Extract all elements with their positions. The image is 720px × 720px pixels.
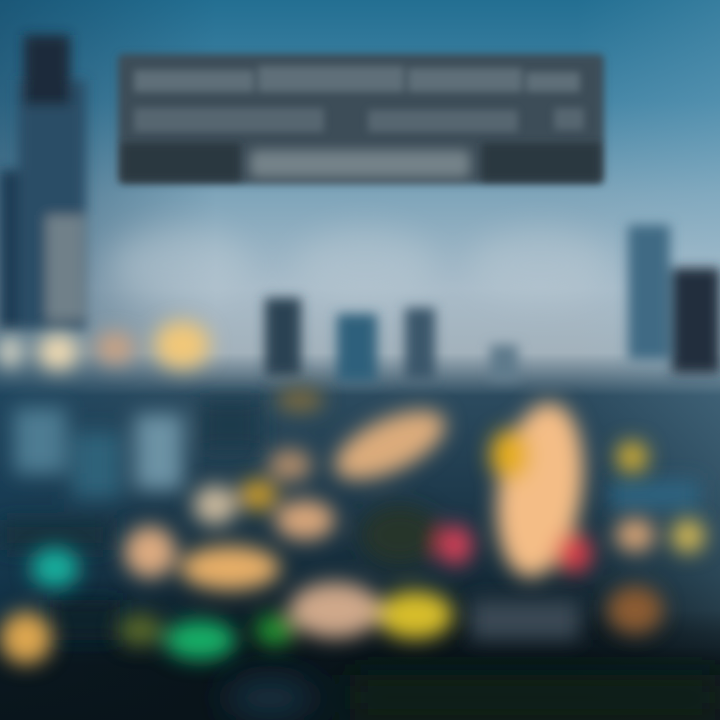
banner panel: [118, 54, 604, 184]
city lights: [0, 321, 705, 664]
title banner: [118, 54, 604, 184]
blurred headline line 3: [250, 150, 470, 178]
right towers: [628, 225, 720, 373]
building blocks in the lower city: [0, 400, 700, 640]
dark banner segment right: [482, 143, 600, 181]
blurred headline line 1: [134, 66, 580, 92]
dark banner segment left: [122, 143, 240, 181]
left tower: [0, 35, 86, 330]
faint clouds: [110, 229, 610, 301]
dark floor overlay: [0, 610, 720, 720]
middle skyline: [265, 298, 518, 382]
blurred headline line 2: [134, 108, 584, 132]
dark foreground: [225, 675, 720, 720]
